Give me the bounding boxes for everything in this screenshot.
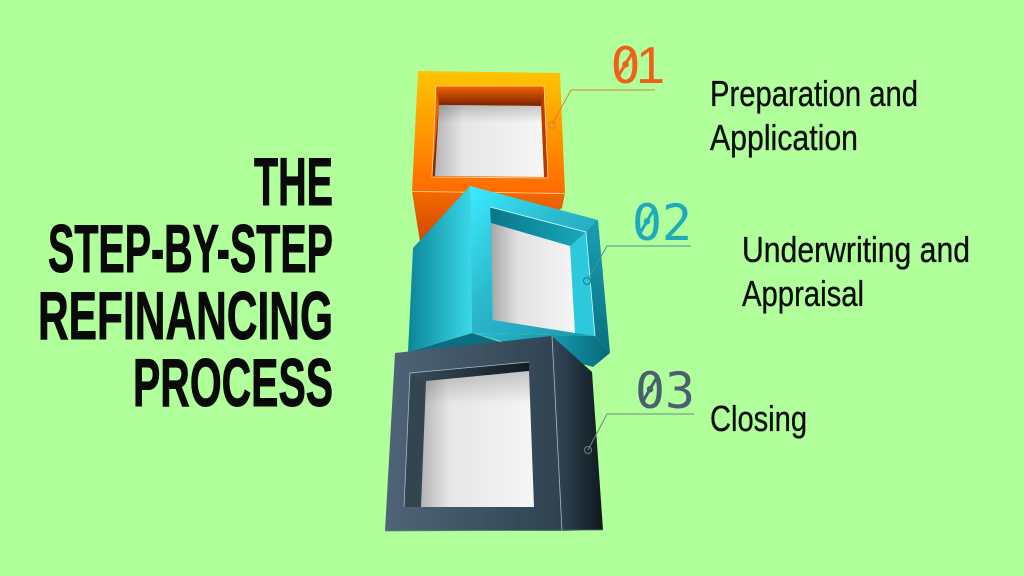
step 2 label: Appraisal	[742, 273, 864, 314]
title: PROCESS	[133, 345, 333, 421]
number 02 with leader line: 02	[632, 194, 692, 252]
number 02 with leader line	[584, 194, 692, 284]
teal cube	[408, 186, 610, 367]
number 01 with leader line: 0	[610, 37, 641, 95]
title: THE	[254, 144, 333, 220]
step 2 label: Underwriting and	[742, 229, 970, 270]
step 1 label: Application	[710, 117, 858, 158]
step 2 label	[742, 229, 970, 314]
number 03 with leader line: 03	[635, 362, 695, 420]
step 1 label	[710, 73, 918, 158]
dark cube	[385, 336, 603, 531]
title: STEP-BY-STEP	[48, 211, 333, 287]
title	[38, 144, 333, 421]
number 01 with leader line: 1	[636, 37, 665, 95]
title: REFINANCING	[38, 278, 333, 354]
step 3 label: Closing	[710, 398, 807, 439]
number 03 with leader line	[584, 362, 695, 454]
step 1 label: Preparation and	[710, 73, 918, 114]
orange cube	[412, 71, 565, 242]
number 01 with leader line	[548, 37, 665, 128]
